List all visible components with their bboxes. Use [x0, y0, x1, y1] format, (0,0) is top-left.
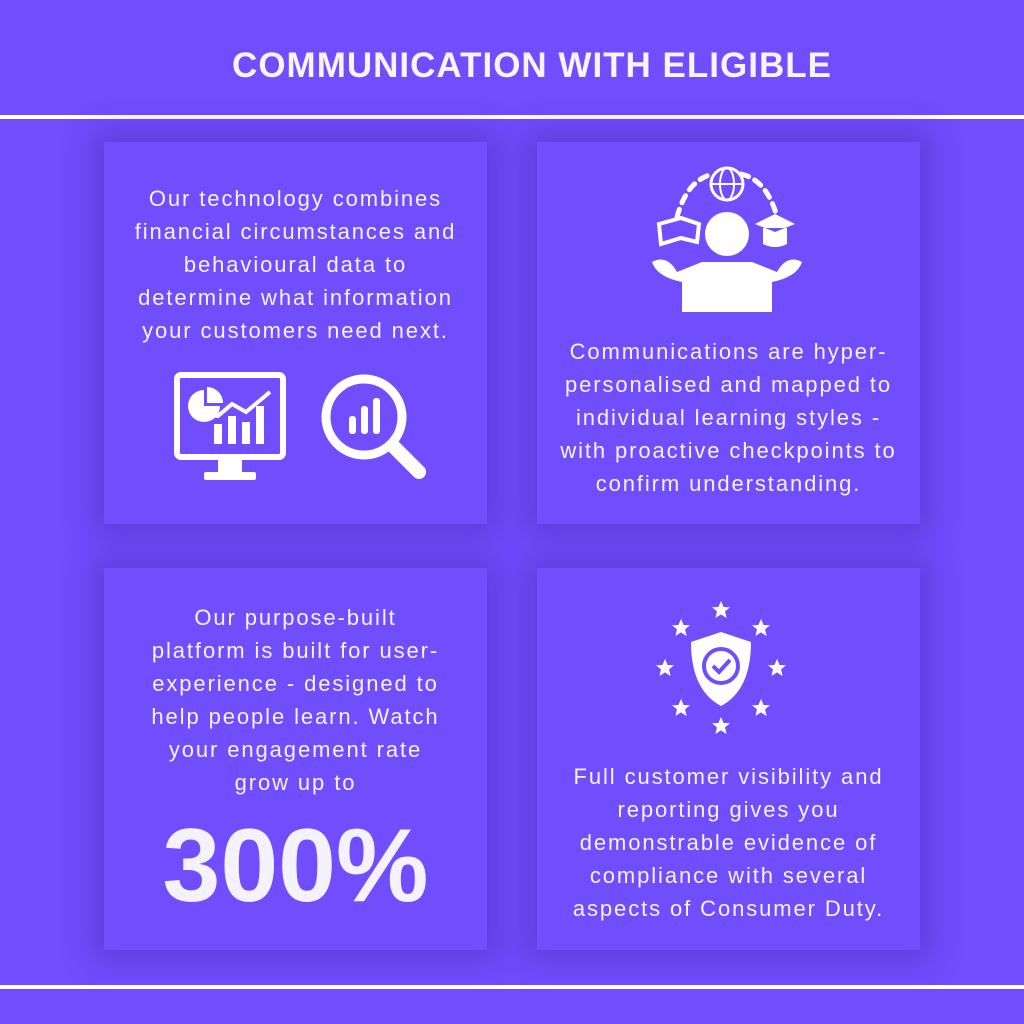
text: engagement: Our purpose-built: [194, 605, 397, 630]
text: engagement: help people learn. Watch: [151, 704, 440, 729]
panel: compliance: [537, 568, 920, 950]
text: personalised: individual learning styles -: [576, 405, 881, 430]
text: personalised: Communications are hyper-: [570, 339, 887, 364]
text: compliance: demonstrable evidence of: [580, 830, 877, 855]
icon: shield with stars: [656, 601, 786, 734]
text: personalised: confirm understanding.: [596, 471, 861, 496]
text: engagement: platform is built for user-: [152, 638, 439, 663]
text: personalised: [560, 339, 897, 496]
text: compliance: Full customer visibility and: [574, 764, 883, 789]
panel: engagement: [104, 568, 487, 950]
text: technology: determine what information: [138, 285, 453, 310]
text: technology: financial circumstances and: [135, 219, 456, 244]
text: engagement: your engagement rate: [169, 737, 422, 762]
text: technology: your customers need next.: [142, 318, 449, 343]
title: COMMUNICATION WITH ELIGIBLE: [232, 46, 832, 85]
icon: monitor chart: [174, 372, 286, 480]
text: engagement: grow up to: [235, 770, 356, 795]
text: technology: [135, 186, 456, 343]
stat: 300%: 300%: [162, 808, 428, 924]
text: personalised: with proactive checkpoints to: [560, 438, 897, 463]
text: compliance: reporting gives you: [618, 797, 839, 822]
panel: technology: [104, 142, 487, 524]
text: engagement: experience - designed to: [152, 671, 439, 696]
icon: learner juggling: [652, 166, 802, 312]
text: compliance: aspects of Consumer Duty.: [573, 896, 884, 921]
text: engagement: [151, 605, 440, 795]
icon: magnifier: [322, 374, 426, 479]
text: compliance: [573, 764, 884, 921]
text: technology: Our technology combines: [149, 186, 442, 211]
panel: personalised: [537, 142, 920, 524]
text: personalised: personalised and mapped to: [565, 372, 892, 397]
text: technology: behavioural data to: [184, 252, 407, 277]
text: compliance: compliance with several: [590, 863, 867, 888]
